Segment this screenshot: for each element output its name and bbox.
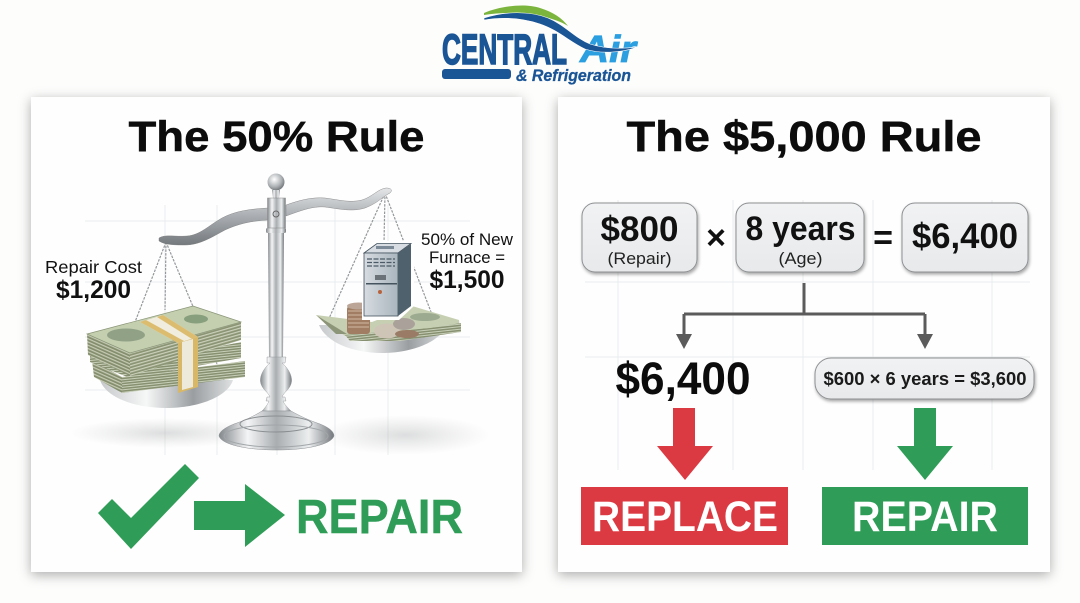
scale post	[268, 232, 284, 357]
box: repair amount: (Repair)	[608, 249, 672, 268]
operator: equals: =	[873, 219, 893, 257]
button: replace: REPLACE	[592, 493, 778, 541]
label: repair cost: Repair Cost	[45, 257, 142, 277]
heading: the 50% rule: The 50% Rule	[128, 113, 424, 161]
heading: the $5,000 rule: The $5,000 Rule	[626, 113, 982, 161]
value: $6,400: $6,400	[616, 353, 750, 404]
label: repair cost	[45, 257, 142, 304]
label: repair cost: $1,200	[56, 276, 131, 304]
left pan	[100, 380, 233, 408]
box: repair amount	[582, 203, 697, 272]
scale beam	[159, 188, 391, 245]
result: repair: REPAIR	[296, 491, 463, 544]
label: 50% of new furnace: Furnace =	[429, 248, 505, 267]
logo: Central Air & Refrigeration: CENTRAL	[442, 26, 567, 74]
icon: check mark	[98, 464, 199, 549]
button: repair	[822, 487, 1028, 545]
money stacks	[87, 306, 245, 393]
scale base	[219, 411, 334, 450]
logo: Central Air & Refrigeration: Air	[579, 29, 638, 71]
arrow: red down	[657, 408, 713, 480]
icon: right arrow	[194, 484, 285, 547]
box: age in years: (Age)	[778, 249, 822, 268]
icon: balance scale	[70, 174, 490, 455]
icon: furnace	[362, 241, 414, 320]
label: 50% of new furnace	[421, 230, 514, 294]
button: repair: REPAIR	[852, 493, 998, 541]
operator: multiply: ×	[706, 219, 726, 257]
right pan	[319, 325, 447, 353]
arrow: branching connector	[676, 283, 933, 349]
bills and coins on right pan	[316, 302, 461, 341]
label: 50% of new furnace: 50% of New	[421, 230, 514, 249]
box: result: $6,400	[912, 217, 1018, 256]
scale vase	[260, 357, 292, 411]
arrow: green down	[897, 408, 953, 480]
panel: the $5,000 rule	[558, 97, 1050, 572]
panel: the 50% rule	[31, 97, 522, 572]
logo: Central Air & Refrigeration: & Refrigeration	[516, 66, 631, 85]
label: 50% of new furnace: $1,500	[430, 266, 504, 294]
box: result	[902, 203, 1028, 272]
box: repair amount: $800	[600, 210, 678, 249]
pill: alternate calculation	[815, 358, 1034, 399]
logo: Central Air & Refrigeration	[442, 6, 638, 85]
right chains	[327, 193, 438, 330]
pill: alternate calculation: $600 × 6 years = $3,600	[824, 369, 1026, 389]
box: age in years	[736, 203, 864, 272]
left chains	[135, 242, 225, 383]
box: age in years: 8 years	[746, 210, 856, 248]
